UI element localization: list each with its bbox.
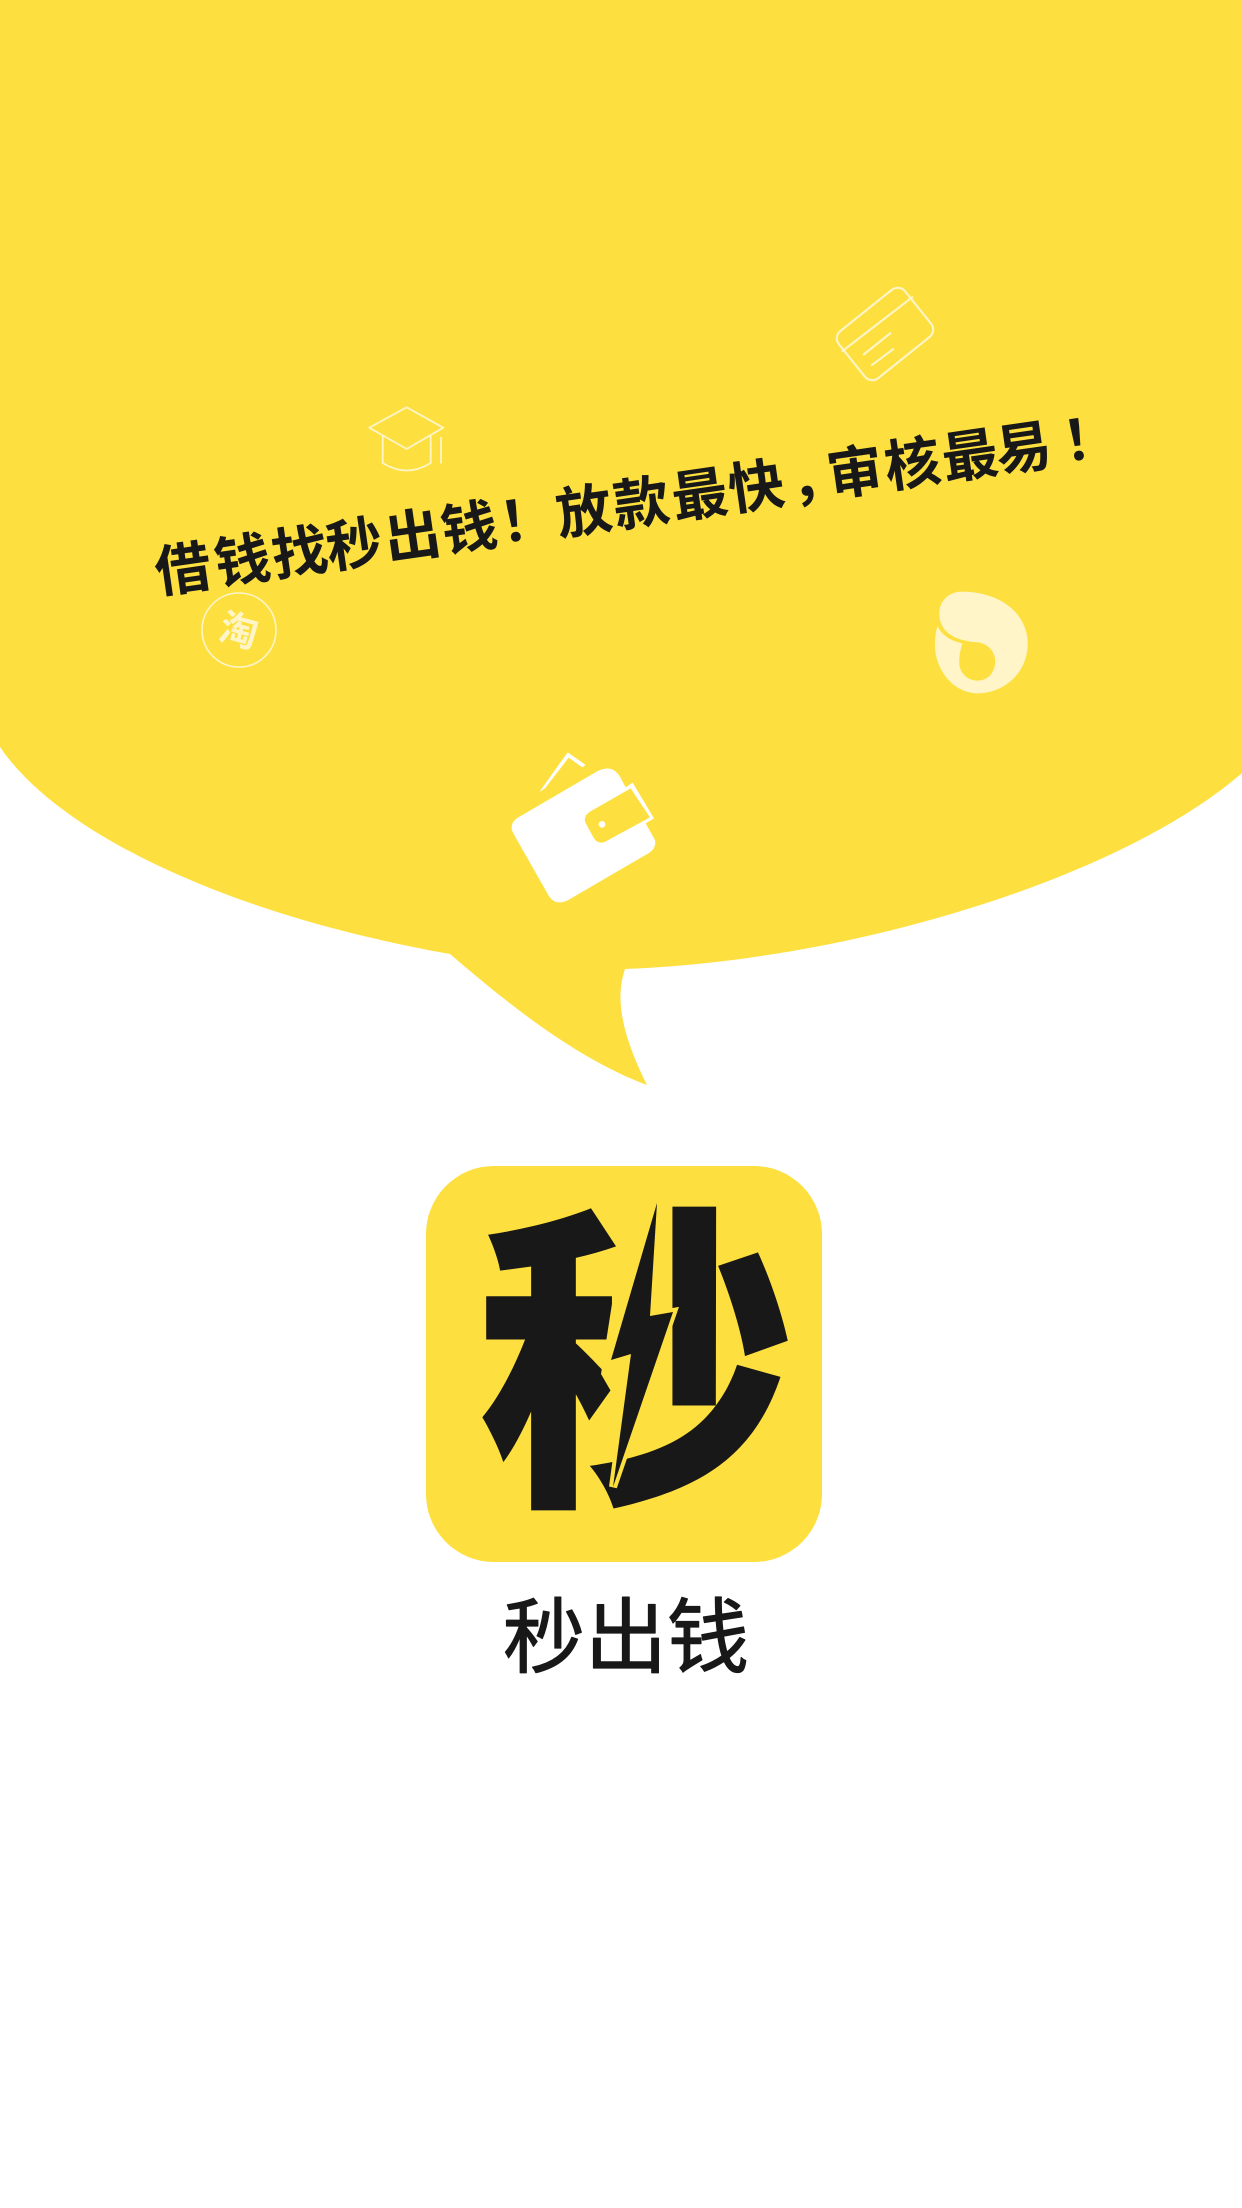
- icon: graduation cap: [369, 407, 443, 470]
- logo character: 秒: [478, 1109, 794, 1572]
- icon: credit card: [833, 284, 937, 384]
- icon: blob logo: [935, 592, 1028, 693]
- app logo tile: [426, 1109, 822, 1572]
- headline slogan: 放款最快: [552, 452, 788, 547]
- app name wordmark: 秒出钱: [503, 1571, 749, 1690]
- headline slogan: 审核最易: [823, 413, 1056, 508]
- headline slogan: ！: [495, 485, 560, 555]
- speech bubble background: [0, 0, 1242, 1085]
- icon: lightning bolt: [611, 1203, 673, 1487]
- headline slogan: ，: [785, 443, 850, 513]
- headline slogan: ！: [1058, 404, 1123, 474]
- icon: wallet: [512, 752, 655, 902]
- gap behind lightning bolt: [601, 1240, 670, 1400]
- icon: taobao circle: 淘: [214, 596, 265, 659]
- headline slogan: 借钱找秒出钱: [151, 493, 501, 605]
- icon: taobao circle: [202, 593, 276, 667]
